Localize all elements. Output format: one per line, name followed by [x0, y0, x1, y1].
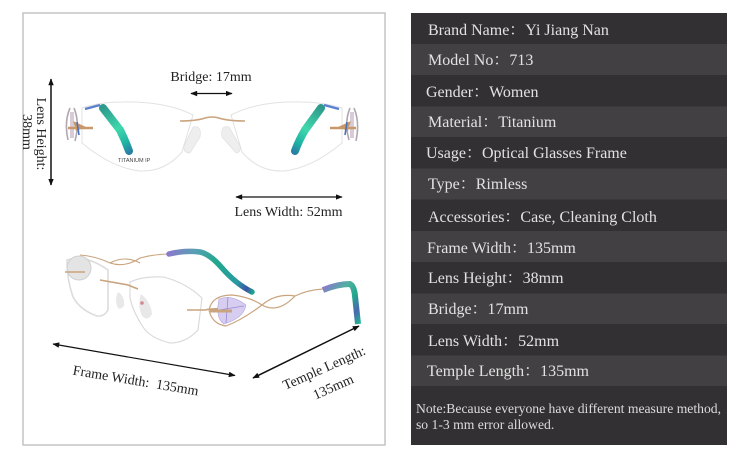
nose pads — [116, 292, 152, 319]
label: bridge: Bridge: 17mm — [170, 70, 252, 85]
row: type: Type：Rimless — [428, 176, 527, 193]
note: Note:Because everyone have different measure method, — [416, 401, 721, 416]
row: gender: Gender：Women — [426, 84, 538, 101]
row: temple length — [411, 356, 727, 386]
right temple — [295, 108, 321, 151]
row: usage: Usage：Optical Glasses Frame — [426, 145, 627, 162]
far lens — [67, 258, 108, 316]
row: brand name — [411, 13, 727, 44]
row: accessories: Accessories：Case, Cleaning Cloth — [428, 209, 657, 226]
far temple — [80, 254, 170, 265]
row: accessories — [411, 200, 727, 231]
far temple tip — [169, 251, 252, 292]
row: model — [411, 44, 727, 75]
front view glasses — [66, 102, 358, 171]
arrow: lens width — [236, 196, 342, 198]
row: temple length: Temple Length：135mm — [427, 363, 590, 380]
row: usage — [411, 137, 727, 168]
crystal ornament — [210, 297, 246, 324]
arrow: temple length — [253, 326, 359, 378]
lens engraving: TITANIUM IP — [118, 158, 151, 164]
side view glasses — [65, 251, 358, 343]
arrow: bridge — [191, 92, 232, 94]
row: frame width — [411, 231, 727, 262]
panel: glasses measurements — [23, 13, 385, 445]
right lens — [231, 102, 342, 171]
panel: specifications — [411, 13, 727, 445]
row: bridge — [411, 294, 727, 324]
row: material: Material：Titanium — [428, 114, 557, 131]
label: lens width: Lens Width: 52mm — [234, 205, 343, 220]
row: bridge: Bridge：17mm — [428, 301, 529, 318]
row: type — [411, 168, 727, 200]
label: lens height: Lens Height: — [33, 98, 48, 170]
row: material — [411, 106, 727, 137]
near temple wire — [209, 289, 323, 326]
nose pads — [184, 127, 240, 153]
arrow: lens height — [50, 79, 52, 185]
left ornament — [66, 108, 93, 141]
row: brand name: Brand Name：Yi Jiang Nan — [428, 22, 609, 39]
row: frame width: Frame Width：135mm — [427, 240, 576, 257]
label: temple length value: 135mm — [311, 372, 356, 403]
near temple tip — [323, 284, 358, 324]
label: temple length: Temple Length: — [281, 344, 368, 394]
panel background — [411, 13, 727, 445]
row: gender — [411, 75, 727, 106]
row: model: Model No：713 — [428, 52, 533, 69]
row: lens height — [411, 262, 727, 294]
bridge — [180, 117, 245, 121]
label: frame width: Frame Width: 135mm — [72, 364, 200, 399]
nose pad screw — [140, 301, 144, 305]
left lens — [82, 102, 193, 171]
label: lens height value: 38mm — [19, 114, 34, 150]
arrow: frame width — [53, 344, 235, 376]
right ornament — [330, 108, 358, 141]
near lens — [130, 277, 202, 343]
left temple — [103, 108, 129, 151]
bridge and hinge — [65, 272, 232, 310]
note — [416, 401, 721, 432]
note: so 1-3 mm error allowed. — [416, 417, 554, 432]
temple tips — [85, 105, 339, 109]
row: lens width: Lens Width：52mm — [428, 333, 560, 350]
row: lens height: Lens Height：38mm — [428, 270, 564, 287]
far ornament — [67, 256, 91, 280]
row: lens width — [411, 324, 727, 356]
